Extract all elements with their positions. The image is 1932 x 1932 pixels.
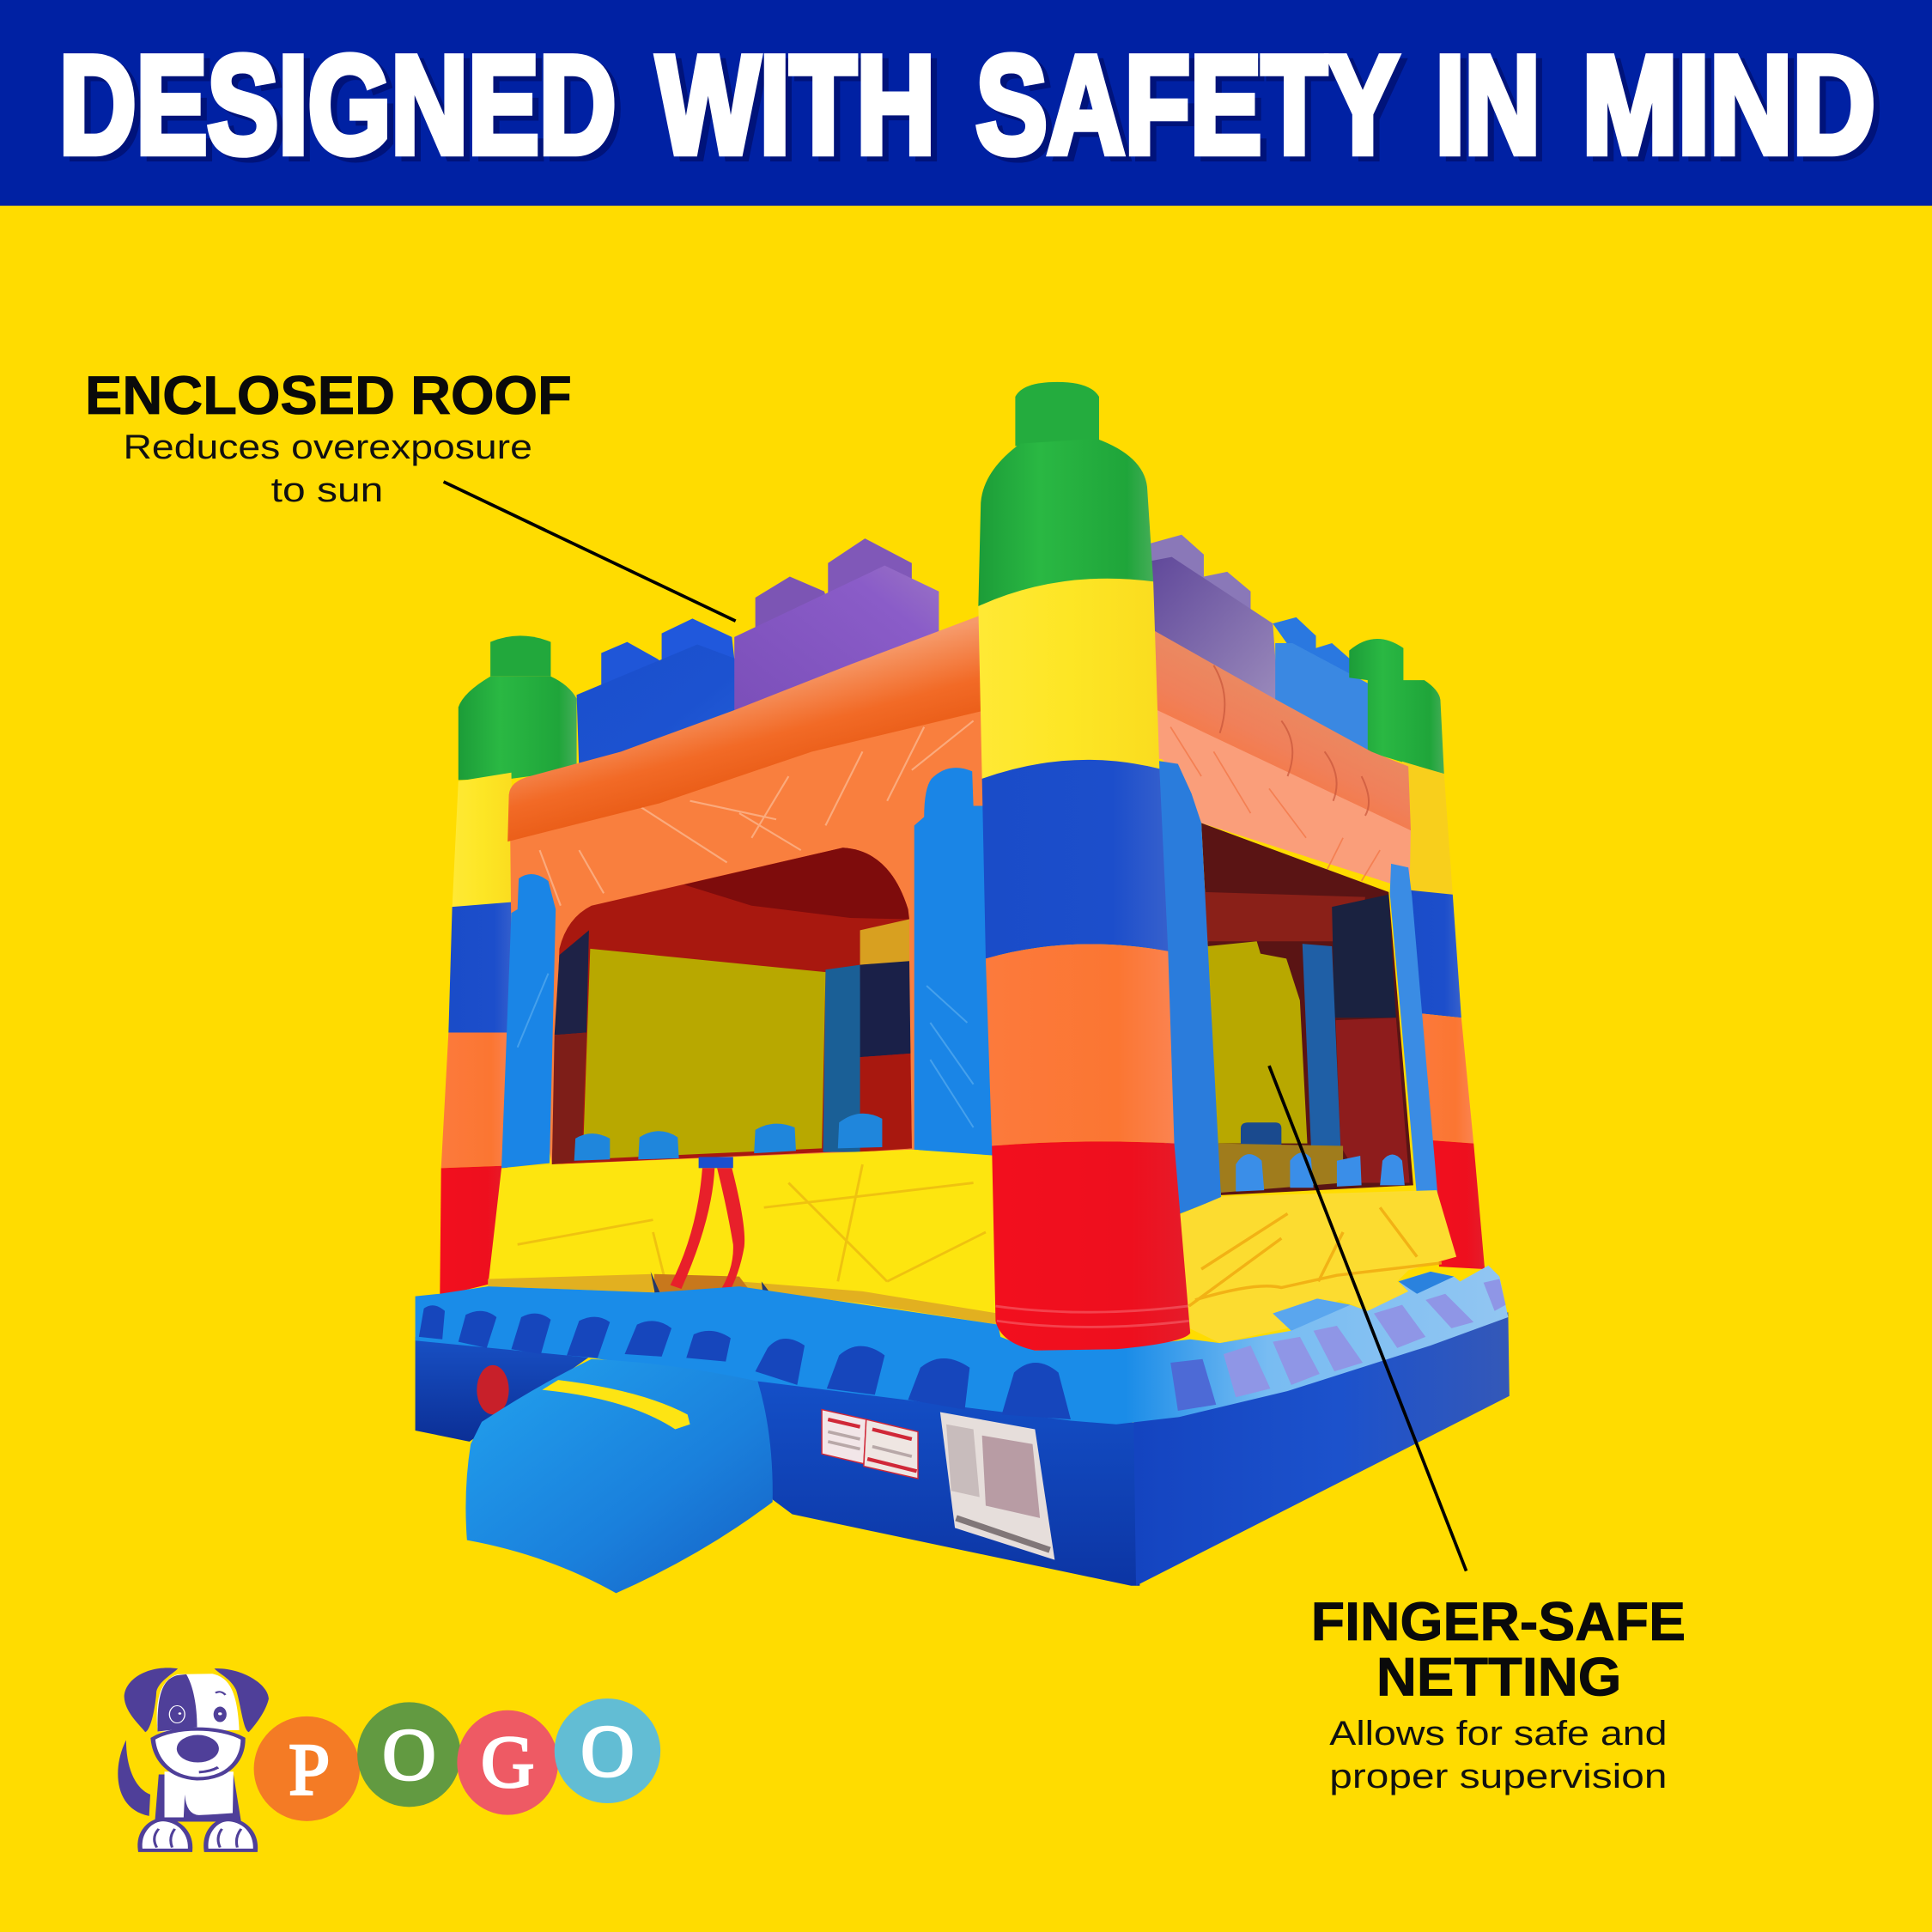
right pillar (914, 768, 998, 1159)
title shadow: SAFETY (982, 33, 1405, 188)
letter P (254, 1716, 360, 1821)
canopy (1146, 702, 1411, 890)
roof roll (1146, 626, 1411, 830)
title: IN (1436, 27, 1540, 183)
title: WITH (657, 27, 935, 183)
letter P: P (289, 1728, 330, 1810)
title shadow (65, 33, 1881, 188)
left rear tower (440, 635, 577, 1297)
body: enclosed roof (123, 428, 532, 509)
front entry step (465, 1359, 773, 1593)
arch opening (552, 848, 912, 1164)
title shadow: IN (1442, 33, 1546, 188)
title: DESIGNED (59, 27, 616, 183)
body: finger-safe netting: proper supervision (1329, 1757, 1667, 1795)
arched windows (419, 1305, 1071, 1419)
window seen through side (1207, 941, 1307, 1144)
callout: enclosed roof (85, 366, 736, 621)
front tower (978, 382, 1190, 1351)
logo: pogo (118, 1668, 660, 1850)
red straps (651, 1157, 776, 1303)
roof roll (507, 609, 998, 841)
header banner (0, 0, 1932, 206)
body: enclosed roof: Reduces overexposure (123, 428, 532, 466)
heading: finger-safe netting (1311, 1592, 1686, 1707)
front base wall (756, 1377, 1139, 1586)
title: MIND (1582, 27, 1875, 183)
leader line: roof (444, 482, 736, 621)
callout: finger-safe netting (1269, 1066, 1686, 1795)
right roof blocks (1146, 535, 1374, 762)
side windows (1170, 1279, 1506, 1411)
right side wall (1146, 626, 1456, 1343)
interior battlements (574, 1114, 882, 1161)
body: finger-safe netting (1329, 1714, 1667, 1795)
left base wall (416, 1337, 592, 1442)
inner right pillar (1390, 864, 1438, 1198)
body: finger-safe netting: Allows for safe and (1329, 1714, 1667, 1753)
left roof blocks (577, 538, 939, 770)
body: enclosed roof: to sun (271, 471, 383, 509)
inner left pillar (1146, 759, 1221, 1218)
letter O: O (382, 1713, 435, 1795)
letter G (457, 1710, 558, 1815)
dog mascot (118, 1668, 269, 1850)
canopy (510, 690, 998, 1164)
front left wall (488, 609, 998, 1325)
right rear tower (1349, 639, 1485, 1269)
letter O: O (580, 1710, 635, 1792)
title shadow: WITH (663, 33, 941, 188)
left pillar (501, 874, 556, 1168)
warning badge (477, 1365, 509, 1414)
bounce house illustration (416, 382, 1510, 1593)
letter O (357, 1702, 461, 1807)
title (59, 27, 1875, 183)
yellow wall (1170, 1190, 1456, 1343)
window seen through bounce house (583, 949, 825, 1159)
letter G: G (481, 1721, 534, 1803)
small warning labels (822, 1410, 918, 1479)
large safety label (940, 1412, 1054, 1560)
base top band (416, 1266, 1508, 1425)
heading: finger-safe netting: FINGER-SAFE (1311, 1592, 1686, 1652)
title: SAFETY (975, 27, 1399, 183)
heading: finger-safe netting: NETTING (1376, 1647, 1621, 1707)
leader line: netting (1269, 1066, 1467, 1571)
right base wall (1133, 1312, 1510, 1586)
side opening (1201, 823, 1413, 1195)
letter O (555, 1698, 660, 1803)
heading: enclosed roof: ENCLOSED ROOF (85, 366, 572, 426)
title shadow: DESIGNED (65, 33, 623, 188)
yellow wall (488, 1150, 998, 1325)
inflatable base (416, 1266, 1510, 1593)
